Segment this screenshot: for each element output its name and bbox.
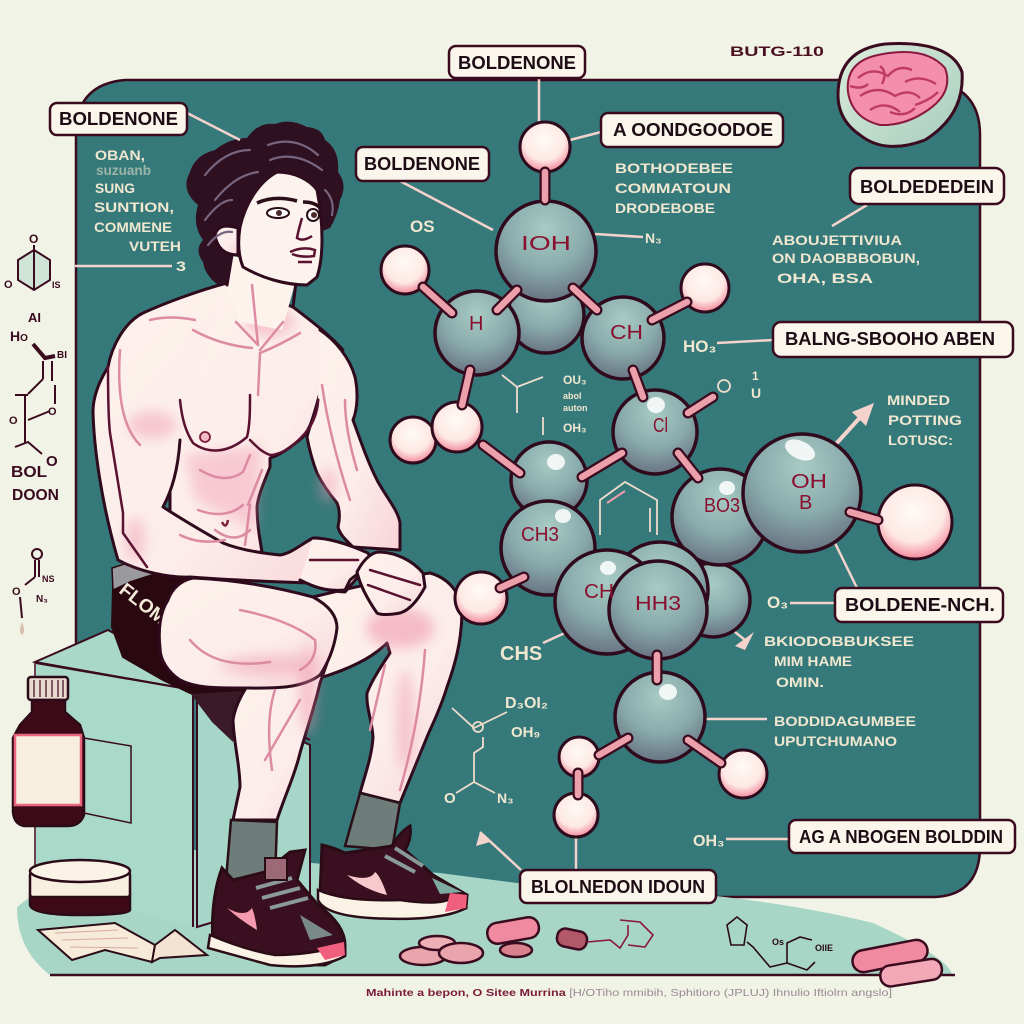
nipple — [200, 432, 210, 442]
molecule: Cl — [653, 415, 668, 437]
chem diagram: left long chain: BI — [57, 350, 67, 361]
text block: left notes: SUNG — [95, 180, 135, 196]
eyes and brows — [257, 198, 320, 221]
shorts logo: FLOM — [115, 579, 170, 629]
label: boldene-nch — [835, 588, 1003, 622]
text block: left notes: VUTEH — [129, 238, 181, 254]
label: boldenone left: BOLDENONE — [59, 109, 178, 129]
front sock — [226, 820, 277, 880]
chem diagram: left small: O — [12, 586, 21, 598]
connector lines — [75, 78, 874, 870]
rear sock — [345, 793, 400, 850]
text: formula labels: N₃ — [497, 790, 514, 806]
text block: minded note: LOTUSC: — [888, 432, 953, 448]
neck — [226, 255, 296, 330]
text block: center top note: DRODEBOBE — [615, 200, 715, 216]
waistband — [112, 560, 164, 590]
text: formula labels: OS — [410, 217, 435, 236]
brain badge — [838, 44, 962, 146]
text block: left notes: suzuanb — [96, 162, 151, 178]
text block: minded note — [887, 392, 962, 448]
molecule: CH — [610, 322, 643, 344]
bottle label — [15, 735, 81, 805]
molecule — [381, 122, 952, 837]
chem diagram: left long chain — [9, 310, 67, 504]
soft pink shading — [125, 308, 434, 770]
text block: right note: ON DAOBBBOBUN, — [772, 250, 920, 266]
ear — [215, 226, 238, 255]
rear leg — [313, 573, 462, 803]
text: formula labels — [410, 217, 788, 850]
right arm — [307, 330, 400, 550]
molecule: CH3 — [521, 524, 559, 546]
foreground thigh — [159, 578, 337, 688]
chem diagram: left small — [12, 549, 55, 635]
highlights — [647, 397, 665, 413]
text block: lower center note: MIM HAME — [774, 653, 852, 669]
text block: center top note — [615, 160, 733, 216]
book — [38, 923, 207, 962]
seat box — [35, 630, 310, 927]
text block: left notes: OBAN, — [95, 147, 145, 163]
chem diagram: left ring: O — [29, 232, 38, 246]
text: formula labels: CHS — [500, 643, 542, 665]
text: butg code: BUTG-110 — [730, 43, 824, 59]
text: formula labels: U — [751, 385, 761, 401]
label: blolnedon: BLOLNEDON IDOUN — [531, 877, 705, 897]
label: blolnedon — [520, 870, 716, 903]
chem diagram: left long chain: O — [48, 406, 57, 418]
fringe — [212, 132, 330, 228]
chem diagram: left long chain: BOL — [11, 464, 47, 481]
text: formula labels: N₃ — [645, 230, 662, 246]
pills — [400, 916, 943, 988]
jar — [30, 860, 130, 915]
chem diagram: left long chain: HO — [10, 328, 28, 344]
text block: right note: OHA, BSA — [777, 270, 873, 286]
label: boldenone middle: BOLDENONE — [364, 154, 480, 174]
molecule: H — [469, 313, 483, 335]
text block: lower right note — [774, 713, 916, 749]
chem diagram: left ring: IS — [52, 280, 61, 290]
text block: center top note: COMMATOUN — [615, 180, 731, 196]
text block: right note — [772, 232, 920, 286]
text block: left notes: COMMENE — [94, 219, 172, 235]
text block: lower center note — [764, 633, 914, 690]
ring sketches on panel — [452, 375, 730, 793]
text: formula labels: OH₃ — [693, 833, 724, 850]
chem diagram: left ring: O — [4, 279, 13, 291]
bottle — [13, 677, 84, 826]
text block: lower right note: BODDIDAGUMBEE — [774, 713, 916, 729]
chem diagram: left long chain: DOON — [12, 487, 59, 504]
atoms — [508, 277, 584, 353]
neck lines — [227, 255, 296, 307]
paper behind bottle — [84, 738, 131, 823]
left arm — [93, 283, 367, 592]
floor — [17, 850, 952, 975]
molecule: BO3 — [704, 495, 740, 517]
chem diagram: floor — [727, 917, 833, 970]
person — [93, 122, 467, 966]
label: boldenone top — [449, 46, 585, 78]
text block: left notes — [94, 147, 186, 274]
brain icon — [848, 52, 947, 125]
chem diagram: left small: NS — [42, 574, 55, 584]
text block: lower center note: BKIODOBBUKSEE — [764, 633, 914, 649]
text: formula labels: OU₃ — [563, 373, 587, 387]
hair strands — [205, 142, 333, 245]
text block: lower center note: OMIN. — [776, 674, 824, 690]
label: boldenone left — [50, 103, 187, 135]
panel: teal background — [76, 80, 980, 897]
label: nbogen: AG A NBOGEN BOLDDIN — [799, 827, 1003, 847]
text: formula labels: O — [444, 790, 456, 807]
chem diagram: floor: OIIE — [815, 943, 833, 953]
molecule: CH — [584, 581, 614, 603]
rear shoe — [318, 826, 467, 919]
text: formula labels: auton — [563, 403, 588, 413]
label: nbogen — [789, 820, 1015, 853]
text: formula labels: abol — [563, 391, 582, 401]
text: formula labels: OH₃ — [563, 421, 587, 435]
nose and mouth — [290, 218, 315, 262]
molecule: HH3 — [635, 593, 681, 615]
label: balng: BALNG-SBOOHO ABEN — [785, 329, 995, 349]
text block: left notes: 3 — [176, 258, 186, 274]
hair — [186, 122, 344, 284]
chem diagram: left long chain: AI — [28, 310, 41, 325]
torso — [170, 283, 343, 560]
navel — [222, 520, 228, 526]
text block: left notes: SUNTION, — [94, 199, 174, 215]
text block: minded note: POTTING — [888, 412, 962, 428]
text block: lower right note: UPUTCHUMANO — [774, 733, 897, 749]
chem diagram: floor: Os — [772, 937, 784, 947]
text: formula labels: OH₉ — [511, 724, 540, 741]
text: formula labels: 1 — [752, 369, 759, 383]
text block: minded note: MINDED — [887, 392, 950, 408]
text: formula labels: O₃ — [767, 593, 788, 612]
shorts — [112, 570, 243, 693]
label: boldededein — [850, 168, 1004, 204]
chem diagram: left long chain: O — [46, 453, 58, 470]
text: formula labels: D₃OI₂ — [505, 695, 548, 712]
shadow under thigh — [190, 688, 243, 742]
label: boldene-nch: BOLDENE-NCH. — [845, 595, 995, 615]
label: balng — [773, 322, 1013, 357]
label: boldededein: BOLDEDEDEIN — [860, 177, 994, 197]
muscle lines — [108, 367, 318, 567]
label: oondgoodoe: A OONDGOODOE — [613, 120, 773, 140]
front shin — [233, 663, 327, 820]
footer caption: Mahinte a bepon, O Sitee Murrina [H/OTiho mmibih, Sphitioro (JPLUJ) Ihnulio Iftiolrn angslo] — [366, 987, 892, 999]
hands — [300, 538, 425, 614]
label: boldenone middle — [356, 147, 489, 181]
chem diagram: left long chain: O — [9, 415, 18, 427]
molecule: OH — [791, 471, 827, 493]
text block: center top note: BOTHODEBEE — [615, 160, 733, 176]
label: boldenone top: BOLDENONE — [458, 53, 576, 73]
bond stubs — [423, 172, 878, 795]
chem diagram: left ring — [4, 232, 61, 291]
front shoe — [208, 850, 345, 966]
text block: right note: ABOUJETTIVIUA — [772, 232, 902, 248]
molecule: B — [799, 492, 812, 514]
text: formula labels: HO₃ — [683, 337, 716, 356]
label: oondgoodoe — [601, 113, 783, 147]
chem diagram: left small: N₃ — [36, 594, 48, 605]
face — [239, 172, 322, 285]
atom labels: IOH — [521, 233, 571, 255]
